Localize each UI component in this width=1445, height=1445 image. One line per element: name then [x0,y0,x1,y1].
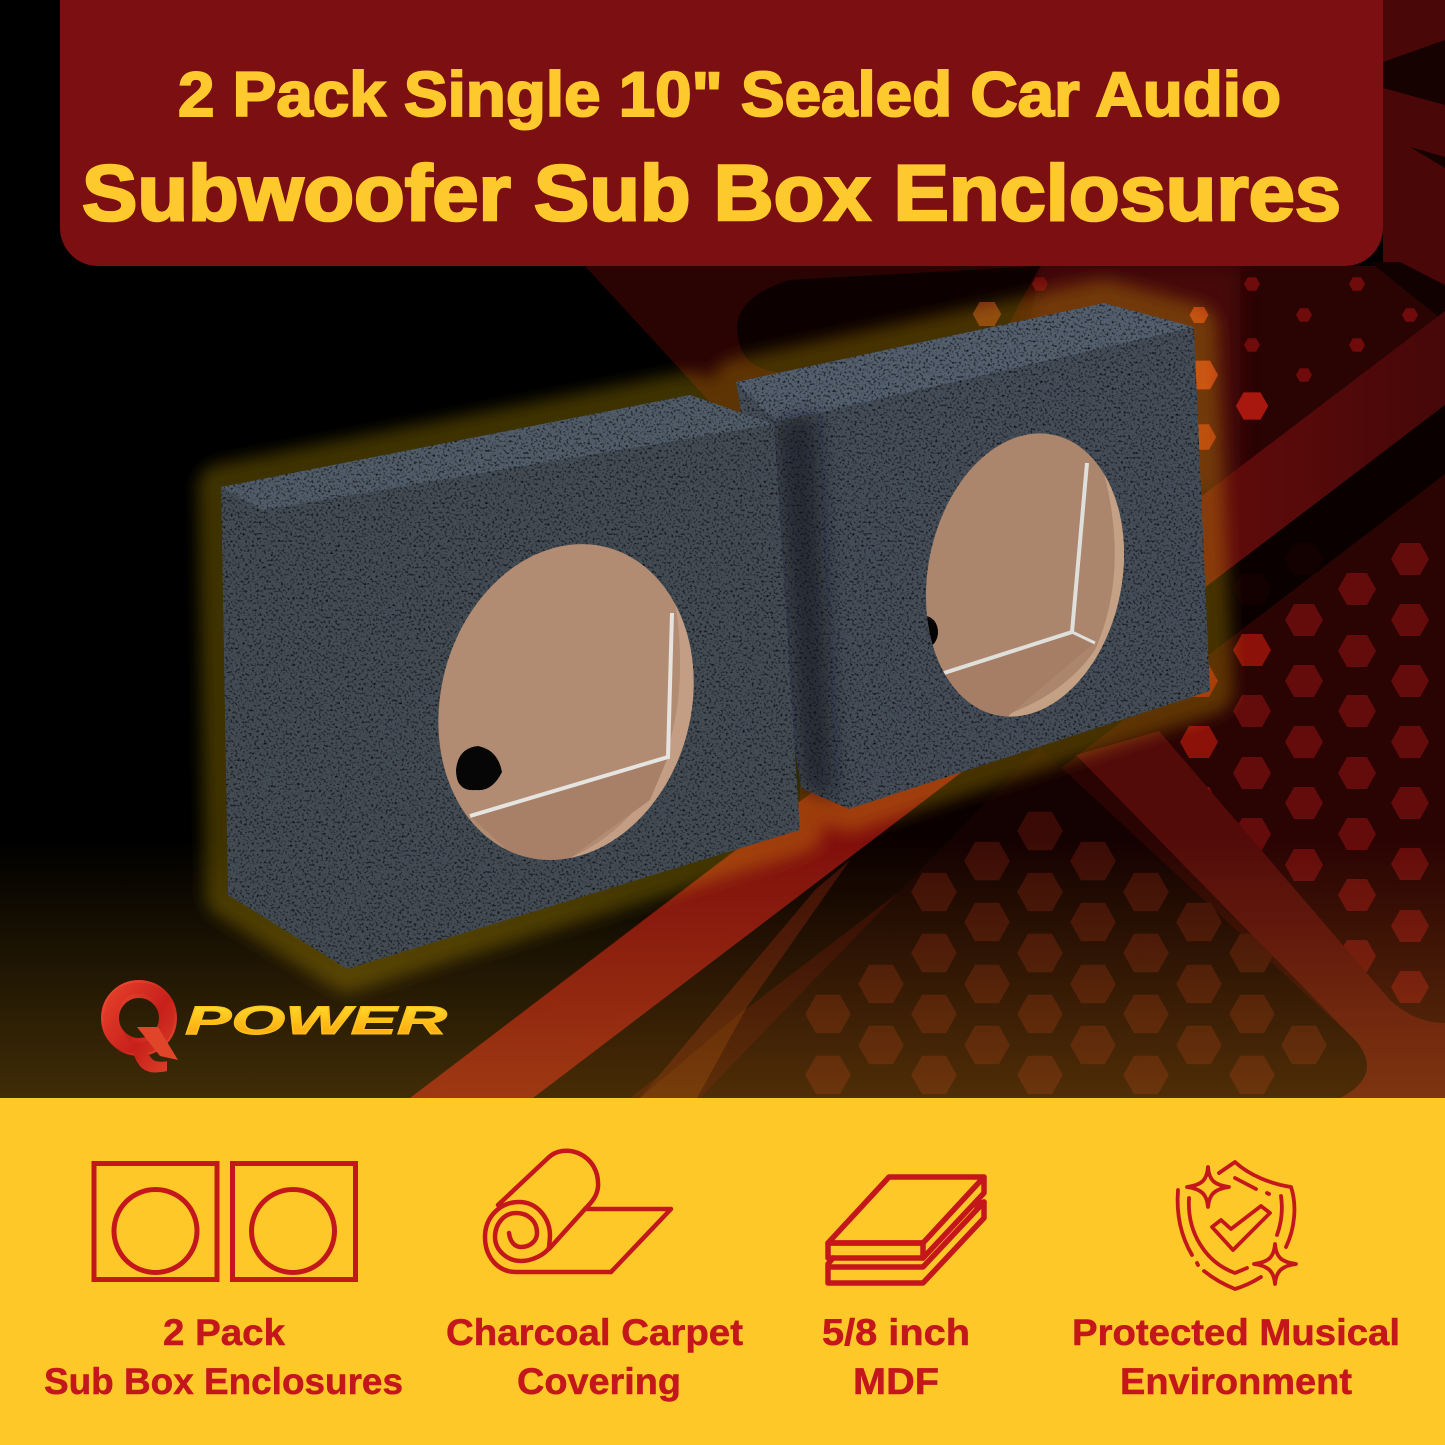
feature strip [0,1098,1445,1445]
icon: stacked boards [828,1177,984,1283]
logo: Q Power: Q [100,963,178,1075]
label: MDF [822,1312,970,1402]
speaker box: left enclosure [221,395,800,969]
logo: Q Power: POWER [185,999,447,1043]
label: protected [1072,1312,1400,1402]
title line 1: 2 Pack Single 10" Sealed Car Audio [178,60,1281,130]
logo: Q Power [100,963,447,1075]
label: MDF: MDF [853,1361,939,1402]
feature: charcoal carpet [446,1151,743,1402]
speaker box: right enclosure [736,303,1210,809]
label: charcoal carpet [446,1312,743,1402]
right box round opening [926,433,1124,717]
label: protected: Environment [1120,1361,1352,1402]
label: MDF: 5/8 inch [822,1312,970,1353]
label: 2 pack: Sub Box Enclosures [44,1361,403,1402]
label: 2 pack [44,1312,403,1402]
feature: 2 pack [44,1164,403,1402]
icon: carpet roll [485,1151,671,1272]
label: charcoal carpet: Covering [517,1361,681,1402]
label: charcoal carpet: Charcoal Carpet [446,1312,743,1353]
background: black and red geometric artwork [0,0,1445,1098]
title panel [60,0,1383,266]
left box round opening [438,544,694,860]
icon: two box fronts [94,1164,356,1280]
glow behind speaker boxes [221,303,1210,969]
label: 2 pack: 2 Pack [163,1312,285,1353]
feature: MDF [822,1177,984,1402]
title line 2: Subwoofer Sub Box Enclosures [82,148,1341,237]
icon: shield with check and sparkles [1178,1162,1296,1289]
label: protected: Protected Musical [1072,1312,1400,1353]
feature: protected [1072,1162,1400,1402]
